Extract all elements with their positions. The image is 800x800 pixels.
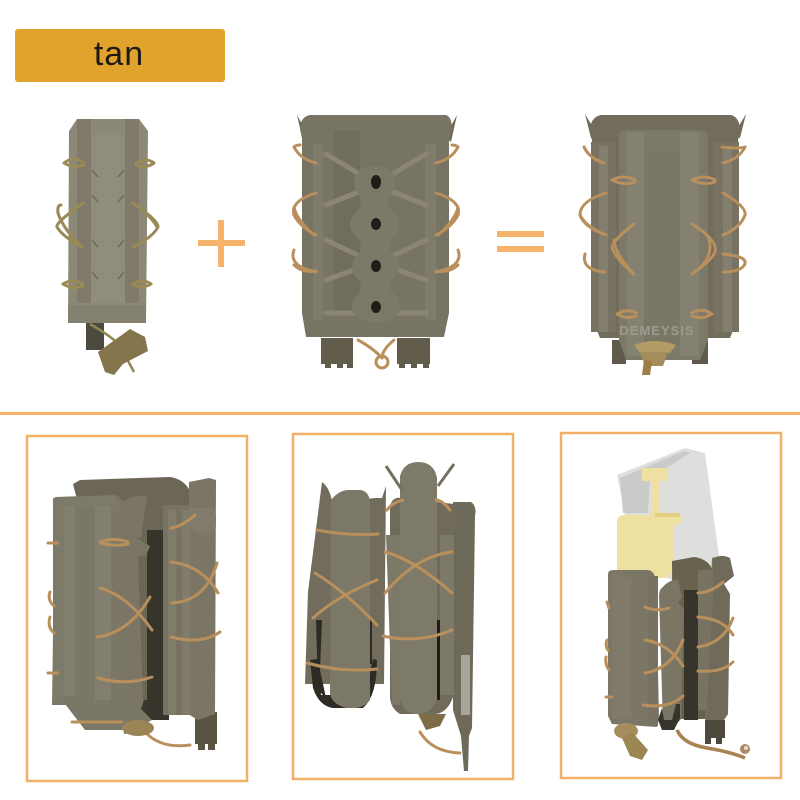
photo: combined pouches [580,114,746,375]
loader: yellow [617,468,682,578]
panel: front view of double pouch [27,436,247,781]
divider line [0,412,800,415]
magazine: clear plastic [617,448,722,580]
photo: rifle pouch back view [293,115,459,368]
label: tan: tan [94,35,144,73]
chain of holes [350,166,400,323]
label: tan [15,29,225,82]
photo: combined pouches: DEMEYSIS [619,323,695,338]
panel: pouch with magazine inserted [561,433,781,778]
icon: plus sign [198,220,245,267]
panel: side view of double pouch [293,434,513,779]
icon: equals sign [497,231,544,252]
photo: single pistol pouch [57,119,158,375]
